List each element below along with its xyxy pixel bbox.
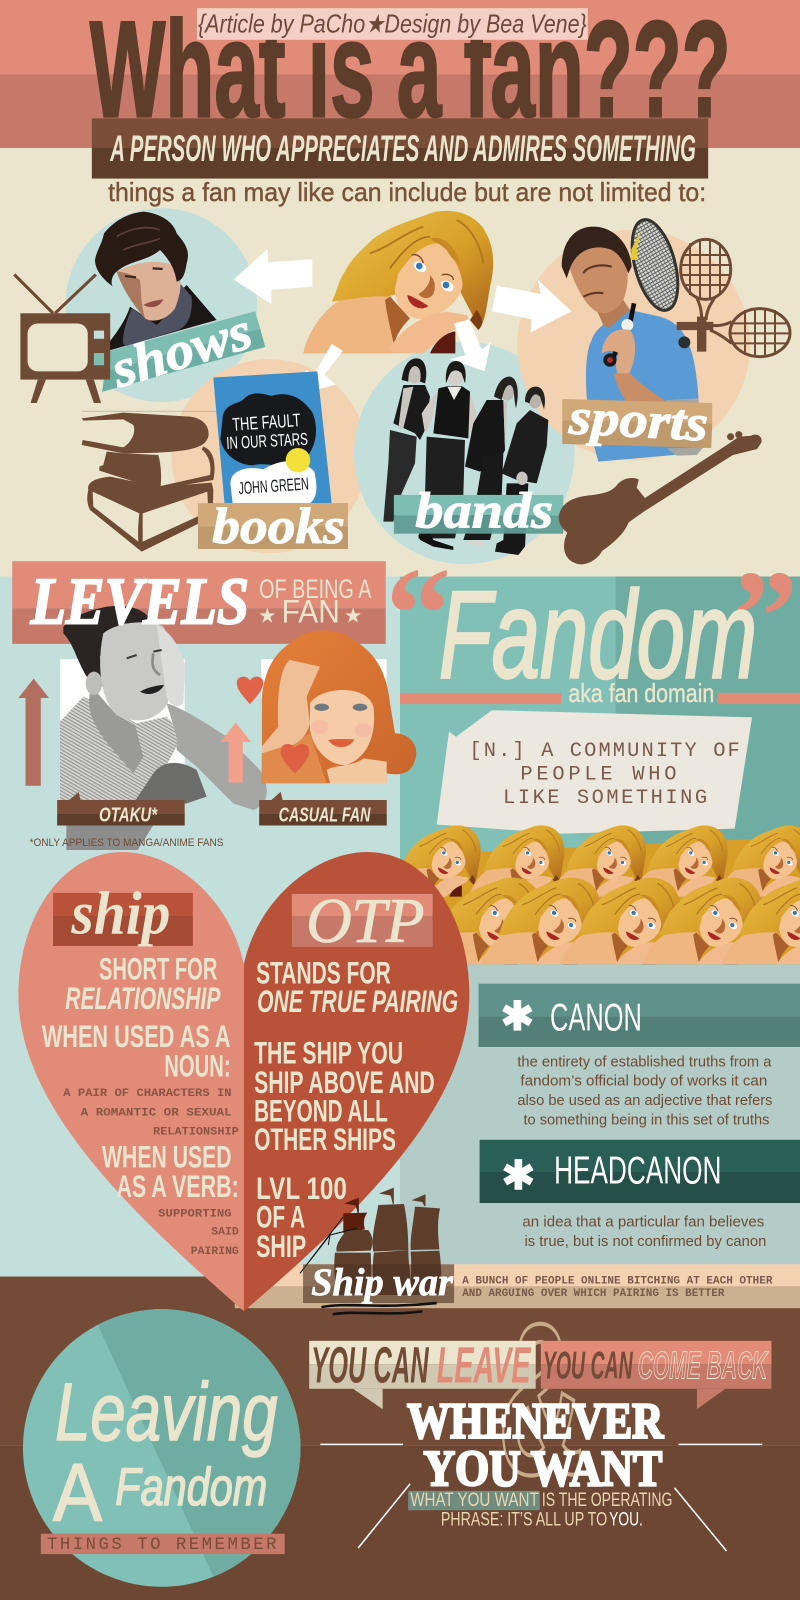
text: leaving a fandom: Fandom <box>115 1458 267 1517</box>
band: bottom brown panel <box>0 1277 800 1600</box>
text: ship war definition <box>462 1276 773 1300</box>
quote mark right: ” <box>733 543 798 690</box>
text: whenever you want: WHENEVER <box>407 1394 664 1450</box>
photo strip below otaku label <box>66 826 153 850</box>
speech bubble: you can leave: YOU CAN <box>311 1337 429 1394</box>
panel background: fandom <box>400 577 800 969</box>
text: ship definition: RELATIONSHIP <box>153 1127 239 1139</box>
canon bar <box>479 984 800 1047</box>
text: ship definition: RELATIONSHIP <box>65 980 221 1016</box>
text: operating phrase: PHRASE: IT’S ALL UP TO <box>441 1509 607 1531</box>
ampersand: & <box>498 1277 584 1519</box>
text: otp definition: BEYOND ALL <box>254 1092 388 1128</box>
tiled blonde crowd <box>386 825 800 969</box>
photo: band of four <box>383 358 548 555</box>
footnote: *ONLY APPLIES TO MANGA/ANIME FANS <box>30 837 223 849</box>
text: ship definition: SAID <box>211 1227 239 1239</box>
label: things to remember: THINGS TO REMEMBER <box>47 1536 277 1555</box>
label: ship war: Ship war <box>311 1261 454 1304</box>
label: ship: ship <box>70 880 170 948</box>
speech bubble: you can come back: YOU CAN <box>543 1345 633 1388</box>
strip: ship war <box>235 1264 800 1308</box>
text: leaving a fandom: A <box>53 1447 103 1538</box>
text: ship definition: A ROMANTIC OR SEXUAL <box>81 1107 232 1119</box>
text: ship war definition: AND ARGUING OVER WHICH PAIRING IS BETTER <box>462 1288 725 1300</box>
circle: books <box>171 359 367 553</box>
subtitle: aka fan domain: aka fan domain <box>568 680 714 708</box>
text: otp definition: STANDS FOR <box>256 955 391 991</box>
text: ship definition: AS A VERB: <box>116 1168 239 1204</box>
photo: crying girl <box>60 606 267 810</box>
icon: television <box>14 274 110 403</box>
circle: bands <box>354 342 574 564</box>
book cover: JOHN GREEN <box>238 473 309 498</box>
arrow: to shows <box>234 249 312 304</box>
book cover: THE FAULT <box>232 409 301 435</box>
thin line above books <box>82 410 219 412</box>
text: ship definition <box>42 951 239 1258</box>
canon text <box>517 1054 772 1128</box>
arrow: to sports <box>492 280 571 333</box>
text: ship definition: WHEN USED <box>102 1138 232 1174</box>
text: operating phrase: YOU. <box>609 1509 643 1531</box>
text: leaving a fandom <box>53 1367 278 1538</box>
text: otp definition: SHIP <box>256 1228 306 1264</box>
canon text: the entirety of established truths from a <box>517 1054 772 1070</box>
headcanon bar <box>480 1140 800 1203</box>
label: otaku: OTAKU* <box>99 804 158 826</box>
text: operating phrase <box>408 1489 672 1531</box>
heading band: levels <box>12 561 386 644</box>
text: otp definition: ONE TRUE PAIRING <box>257 983 458 1019</box>
quote mark left: “ <box>386 540 451 687</box>
headcanon text <box>522 1215 766 1250</box>
text: ship definition: NOUN: <box>164 1048 231 1084</box>
icon: tennis rackets <box>677 239 790 357</box>
circle: leaving a fandom <box>20 1306 306 1592</box>
text: operating phrase: IS THE OPERATING <box>542 1489 672 1511</box>
photo: blonde fan <box>303 211 493 353</box>
paper definition: PEOPLE WHO <box>520 764 677 787</box>
icon: heart upper <box>237 677 263 704</box>
paper definition <box>437 710 752 834</box>
arrow: casual level <box>220 722 251 783</box>
icon: sailing ship <box>300 1188 441 1295</box>
canon bar: CANON <box>550 997 642 1040</box>
text: otp definition: THE SHIP YOU <box>254 1034 403 1070</box>
label: otp: OTP <box>306 886 424 956</box>
photo: detective <box>95 212 217 352</box>
heart right half <box>244 852 469 1311</box>
text: otp definition: OF A <box>256 1199 305 1235</box>
label: shows: shows <box>104 302 258 400</box>
text: levels: LEVELS <box>30 565 249 638</box>
circle: shows <box>65 208 257 402</box>
text: of being a fan: OF BEING A <box>259 574 372 604</box>
icon: stack of books <box>82 413 215 552</box>
photo: tennis player <box>562 215 703 462</box>
text: ship definition: WHEN USED AS A <box>42 1018 231 1054</box>
credits: {Article by PaCho★Design by Bea Vene} <box>198 11 587 39</box>
text: otp definition: OTHER SHIPS <box>254 1121 396 1157</box>
label: otaku <box>57 792 185 826</box>
book cover <box>213 371 332 503</box>
photo: redhead pinup <box>262 630 416 783</box>
headcanon text: is true, but is not confirmed by canon <box>524 1234 766 1250</box>
text: whenever you want <box>407 1394 664 1498</box>
circle: sports <box>517 230 750 460</box>
text: ship war definition: A BUNCH OF PEOPLE ONLINE BITCHING AT EACH OTHER <box>462 1276 773 1288</box>
paper definition: LIKE SOMETHING <box>503 787 707 810</box>
icon: guitar <box>559 431 762 564</box>
text: ship definition: SUPPORTING <box>158 1208 232 1220</box>
text: operating phrase: WHAT YOU WANT <box>410 1489 539 1511</box>
white photo backings <box>60 659 387 792</box>
intro line: things a fan may like can include but are not limited to: <box>108 179 706 207</box>
book cover: IN OUR STARS <box>226 429 308 453</box>
accent lines <box>320 1444 762 1551</box>
subtitle banner <box>92 118 708 179</box>
text: whenever you want: YOU WANT <box>423 1442 662 1498</box>
text: of being a fan: ★ <box>258 605 276 627</box>
text: of being a fan: FAN <box>282 592 340 629</box>
canon text: fandom’s official body of works it can <box>520 1074 767 1090</box>
headcanon text: an idea that a particular fan believes <box>522 1215 764 1231</box>
text: otp definition: LVL 100 <box>256 1170 347 1206</box>
panel background: levels <box>0 577 400 1277</box>
label: bands: bands <box>415 484 553 540</box>
arrow: to books <box>304 344 343 393</box>
arrow: to bands <box>450 319 491 371</box>
speech bubble: you can come back <box>541 1341 771 1409</box>
label: casual fan <box>259 792 387 826</box>
heart left half <box>18 852 244 1311</box>
speech bubble: you can leave: LEAVE <box>437 1337 532 1394</box>
text: of being a fan <box>258 574 372 629</box>
panel background: canon <box>400 964 800 1277</box>
arrow: otaku level <box>18 679 49 786</box>
paper definition: [N.] A COMMUNITY OF <box>469 740 740 763</box>
text: ship definition: PAIRING <box>191 1246 239 1258</box>
label: books: books <box>212 499 345 555</box>
text: ship definition: A PAIR OF CHARACTERS IN <box>63 1088 232 1100</box>
label: casual fan: CASUAL FAN <box>279 804 371 826</box>
label: sports: sports <box>567 389 709 453</box>
canon text: also be used as an adjective that refers <box>517 1093 772 1109</box>
subtitle: aka fan domain <box>400 680 800 708</box>
header band <box>0 0 800 148</box>
canon text: to something being in this set of truths <box>523 1112 769 1128</box>
icon: heart lower <box>281 744 309 773</box>
text: otp definition <box>254 955 458 1264</box>
headcanon bar: HEADCANON <box>554 1150 721 1193</box>
text: otp definition: SHIP ABOVE AND <box>254 1064 435 1100</box>
text: leaving a fandom: Leaving <box>55 1367 278 1458</box>
text: of being a fan: ★ <box>344 605 362 627</box>
text: ship definition: SHORT FOR <box>99 951 217 987</box>
